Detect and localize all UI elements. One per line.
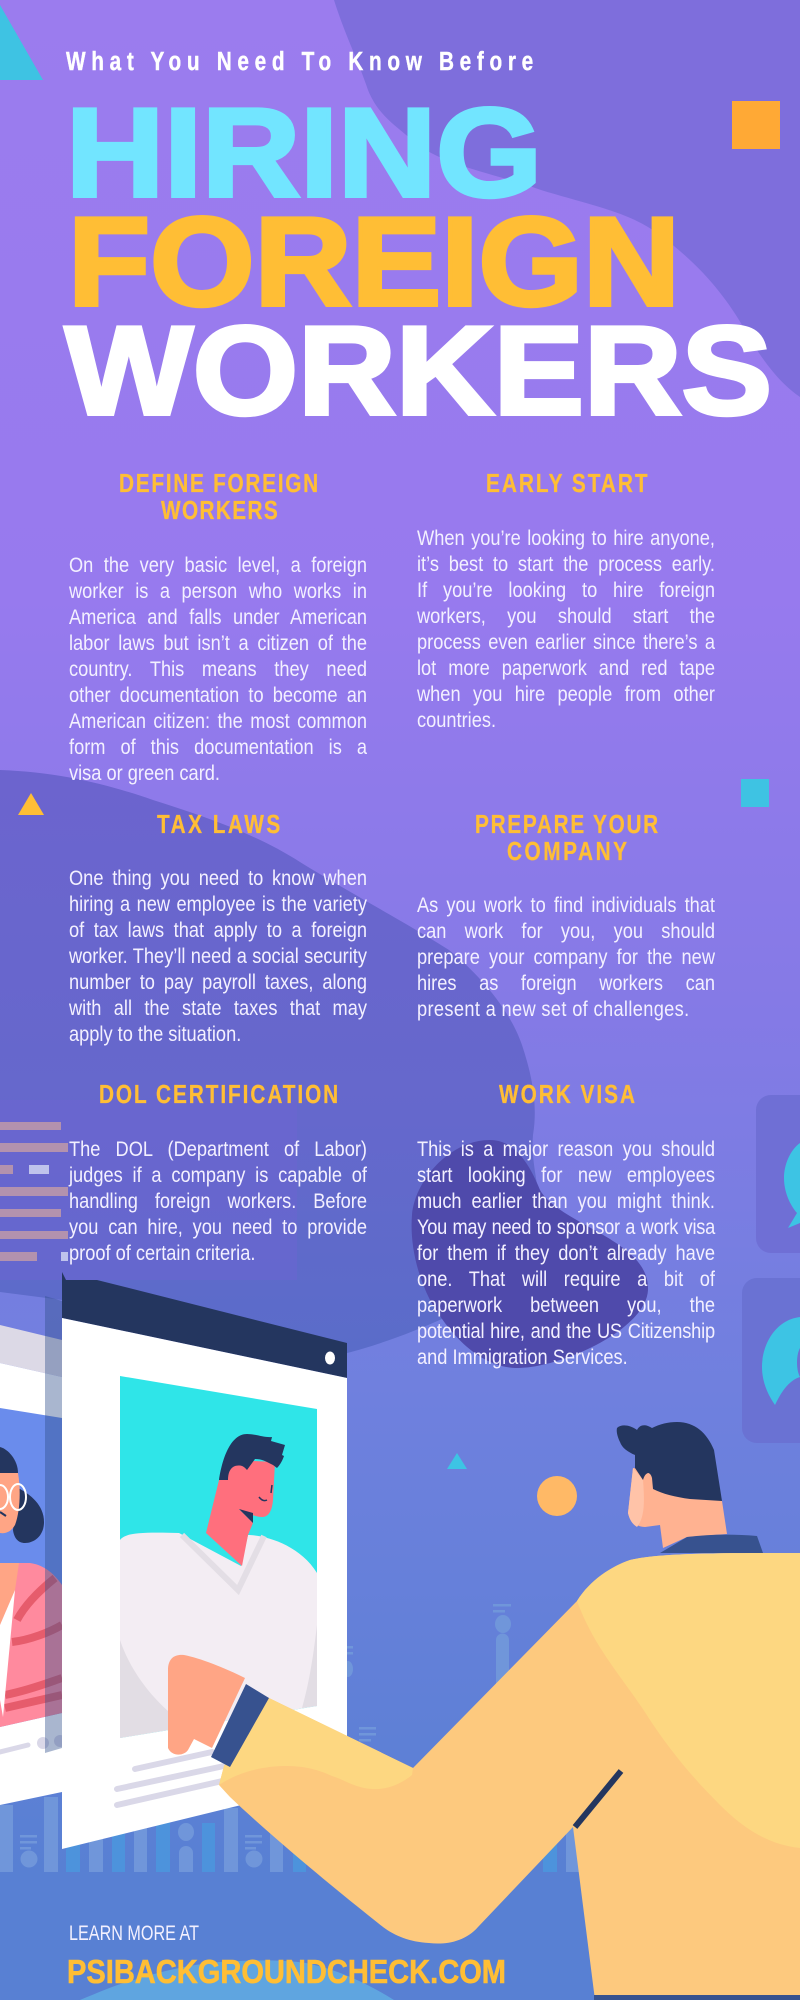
section heading: dol certification: DOL CERTIFICATION [99,1080,338,1109]
text block: work visa: one. That will require a bit of [417,1268,715,1291]
footer: learn more: LEARN MORE AT [69,1922,199,1945]
text block: dol certification: you can hire, you need to provide [69,1216,367,1239]
text block: prepare your company: prepare your company for the new [417,946,715,969]
text block: define foreign workers: worker is a person who works in [69,580,367,603]
text block: dol certification: handling foreign workers. Before [69,1190,367,1213]
profile card: woman [0,1296,66,1805]
heading: subtitle: What You Need To Know Before [66,47,533,76]
icon: yellow triangle [18,793,44,815]
decorative pink bars [0,1122,68,1261]
shirt [120,1533,317,1738]
hem [594,1995,800,2000]
section heading: prepare your company: COMPANY [507,837,627,866]
neck and face [206,1460,275,1566]
text block: tax laws: worker. They’ll need a social security [69,945,367,968]
orange circle [537,1476,577,1516]
text block: define foreign workers: form of this documentation is a [69,736,367,759]
hair and head [628,1468,727,1548]
text block: early start: countries. [417,709,496,732]
sleeve highlight [219,1698,413,1789]
section heading: work visa: WORK VISA [499,1080,635,1109]
icon: orange square [732,101,780,149]
chat card bottom [742,1278,800,1443]
text block: prepare your company: can work for you, you should [417,920,715,943]
cuff [211,1684,269,1767]
text block: tax laws: with all the state taxes that may [69,997,367,1020]
hair [219,1434,285,1480]
text block: early start: when you hire people from other [417,683,715,706]
pocket slash [575,1771,621,1827]
bottom light blob [80,1960,394,2000]
text block: work visa: start looking for new employees [417,1164,715,1187]
text block: define foreign workers [69,554,367,785]
text block: work visa: much earlier than you might think. [417,1190,715,1213]
text block: dol certification: proof of certain criteria. [69,1242,255,1265]
text block: prepare your company: hires as foreign workers can [417,972,715,995]
text block: work visa: You may need to sponsor a work visa [417,1216,715,1239]
text block: prepare your company [417,894,715,1021]
small triangle [447,1453,467,1469]
title: hiring: HIRING [66,82,542,223]
illustration: man viewer [168,1422,800,2000]
top right blob [334,0,800,397]
text block: prepare your company: present a new set of challenges. [417,998,690,1021]
section heading: define foreign workers: WORKERS [161,496,278,525]
text block: tax laws: of tax laws that apply to a foreign [69,919,367,942]
section heading: define foreign workers: DEFINE FOREIGN [119,469,318,498]
section heading: define foreign workers [119,469,318,525]
text block: define foreign workers: On the very basic level, a foreign [69,554,367,577]
icon: cyan square [741,779,769,807]
section heading: tax laws: TAX LAWS [157,810,280,839]
text block: define foreign workers: America and falls under American [69,606,367,629]
text block: dol certification: The DOL (Department of Labor) [69,1138,367,1161]
background bar chart [0,1604,579,1872]
section heading: prepare your company: PREPARE YOUR [475,810,658,839]
text block: early start: When you’re looking to hire anyone, [417,527,715,550]
text block: tax laws: number to pay payroll taxes, along [69,971,367,994]
jacket [219,1553,800,2000]
text block: work visa: potential hire, and the US Citizenship [417,1320,715,1343]
text block: work visa: for them if they don’t already have [417,1242,715,1265]
text block: tax laws: hiring a new employee is the variety [69,893,367,916]
text block: define foreign workers: other documentation to become an [69,684,367,707]
icon: cyan corner triangle [0,5,43,80]
text block: tax laws [69,867,367,1046]
shoulder highlight [577,1553,800,1848]
text block: define foreign workers: visa or green card. [69,762,220,785]
title: workers: WORKERS [65,300,772,441]
text block: early start: workers, you should start the [417,605,715,628]
footer: website: PSIBACKGROUNDCHECK.COM [67,1953,506,1990]
text block: early start: process even earlier since there’s a [417,631,715,654]
text block: work visa: and Immigration Services. [417,1346,628,1369]
text block: tax laws: One thing you need to know when [69,867,367,890]
text block: define foreign workers: American citizen: the most common [69,710,367,733]
middle left blob [0,770,541,1353]
text block: work visa [417,1138,716,1369]
profile card: man [62,1272,347,1849]
collar [660,1535,763,1553]
text block: work visa: paperwork between you, the [417,1294,715,1317]
title: foreign: FOREIGN [68,191,680,332]
section heading: early start: EARLY START [486,469,648,498]
text block: early start: If you’re looking to hire foreign [417,579,715,602]
dark small blob [412,1140,648,1368]
blob tint panel [0,1100,297,1280]
chat card top [756,1095,800,1253]
text block: prepare your company: As you work to find individuals that [417,894,715,917]
card text lines [117,1752,227,1805]
text block: early start: lot more paperwork and red tape [417,657,715,680]
text block: tax laws: apply to the situation. [69,1023,241,1046]
text block: early start: it’s best to start the process early. [417,553,715,576]
text block: work visa: This is a major reason you should [417,1138,715,1161]
text block: define foreign workers: labor laws but isn’t a citizen of the [69,632,367,655]
text block: dol certification [68,1138,367,1265]
text block: early start [417,527,715,732]
text block: dol certification: judges if a company is capable of [69,1164,367,1187]
section heading: prepare your company [475,810,658,866]
text block: define foreign workers: country. This means they need [69,658,367,681]
hand [168,1655,245,1755]
